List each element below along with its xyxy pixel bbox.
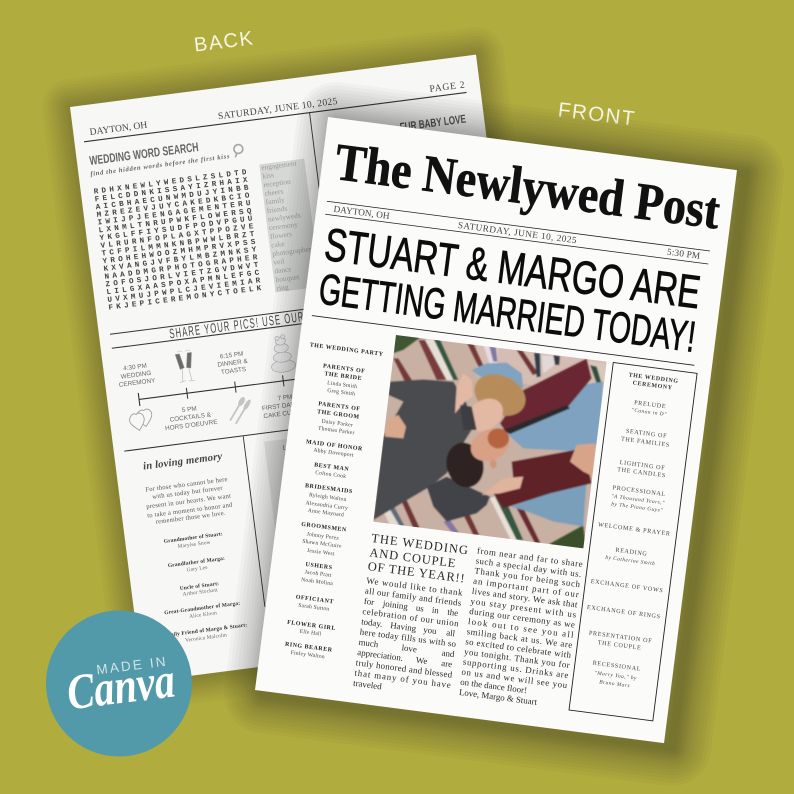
article column 1: the <box>447 607 459 618</box>
article column 2: Love, Margo & Stuart <box>458 687 538 707</box>
maroon vest <box>500 358 592 433</box>
panel: front page <box>255 117 737 743</box>
word list panel: ring <box>276 282 289 293</box>
date: SATURDAY, JUNE 10, 2025 <box>457 221 577 246</box>
ceremony box: Bruno Mars <box>599 679 630 689</box>
wedding party column <box>270 342 384 663</box>
woman's face <box>471 398 504 432</box>
timeline <box>115 324 372 439</box>
article column 2: look out to see you all <box>467 616 575 640</box>
wedding party column: Abby Davenport <box>313 448 354 459</box>
time: 5:30 PM <box>666 248 701 262</box>
woman's hair <box>474 373 526 417</box>
ceremony box: THE CANDLES <box>617 467 666 479</box>
wedding party column: Sarah Sutton <box>298 603 330 613</box>
word search grid <box>93 169 265 313</box>
icon: fork and knife <box>228 395 252 425</box>
article column 1: you <box>423 624 438 636</box>
article column 1: love <box>401 642 418 654</box>
dateline <box>325 201 710 264</box>
wedding party column: BRIDESMAIDS <box>305 483 353 495</box>
word list panel: bouquet <box>275 272 300 284</box>
grey photo panel <box>264 428 393 592</box>
word search grid: NAADDMGRPHOTOGRAPHER <box>104 254 261 282</box>
ceremony box: by The Piano Guys" <box>611 501 663 514</box>
memory names: Veronica Malcolm <box>185 632 228 644</box>
wedding party column: OFFICIANT <box>295 595 334 605</box>
article column 2: you stay present with us <box>470 596 577 620</box>
word list panel: engagement <box>261 159 297 172</box>
wedding party column: GROOMSMEN <box>301 522 347 534</box>
wedding party column: Jessie West <box>307 548 335 557</box>
article column 1: traveled <box>353 678 383 691</box>
timeline entry: ceremony: CEREMONY <box>118 377 156 389</box>
article column 1: are <box>441 658 453 669</box>
article heading: THE WEDDING <box>371 531 469 557</box>
wedding party column: Anne Maynard <box>307 508 344 519</box>
wedding party column: Noah Molina <box>301 577 334 587</box>
article column 1: We <box>415 655 428 666</box>
grass top <box>394 335 421 354</box>
word search grid: TCFPILMMNKNBPWWLBRZT <box>101 231 258 259</box>
word list panel: kiss <box>262 170 274 181</box>
word search grid: FELCDDNKISSAYIZRHAIX <box>94 176 251 204</box>
word search grid: RDHXNEWLYWEDSLZSLDTD <box>93 169 250 197</box>
memory heading: in loving memory <box>142 450 223 472</box>
grass bottom <box>549 525 585 548</box>
article column 2: supporting us. Drinks are <box>462 656 569 680</box>
ceremony box: THE COUPLE <box>597 640 642 652</box>
word search grid: AICBHAECUNWMDUJYINBB <box>95 184 252 212</box>
photo: couple on striped blanket <box>374 335 606 548</box>
article column 1: Having <box>390 620 417 633</box>
memory names <box>151 530 249 647</box>
word search grid: MZREZEVJUYCAKEDKBCIO <box>96 192 253 220</box>
dark collar <box>460 405 477 430</box>
word search grid: VLRURNFOPLAGXTPPOZVE <box>100 223 257 251</box>
word search grid: FKJEPICEREMONYCTOELK <box>108 285 265 313</box>
word list panel: family <box>265 195 286 206</box>
wedding party column: THE BRIDE <box>324 371 362 382</box>
grey photo panel: LOVE NOTES <box>282 439 328 452</box>
back masthead <box>82 79 467 142</box>
wedding party column: Finley Walton <box>290 650 325 660</box>
memory paragraph: remember those we love. <box>155 510 226 526</box>
date: SATURDAY, JUNE 10, 2025 <box>217 96 338 122</box>
blanket stripes bottom <box>384 510 400 525</box>
article column 1: appreciation. <box>357 647 404 663</box>
wedding party column: Greg Smith <box>327 388 355 397</box>
word list panel: photographer <box>272 244 312 258</box>
ceremony box: EXCHANGE OF RINGS <box>586 605 661 620</box>
word list panel: newlyweds <box>267 211 301 224</box>
wedding party column: Johnny Perez <box>306 532 340 542</box>
memory names: Uncle of Stuart: <box>179 581 220 592</box>
article column 1: truly honored and blessed <box>355 657 453 680</box>
memory names: Marylee Snow <box>177 540 211 550</box>
timeline entry: cocktails: COCKTAILS & <box>169 411 212 424</box>
page number: PAGE 2 <box>429 80 465 95</box>
article column 2: from near and far to share <box>476 545 583 569</box>
label: back: BACK <box>193 27 255 57</box>
article column 1: joining <box>381 598 409 612</box>
headline <box>316 218 704 362</box>
article column 1 <box>353 575 464 700</box>
ceremony box: READING <box>615 548 648 558</box>
location: DAYTON, OH <box>89 120 148 138</box>
wedding party column: Ryleigh Walton <box>309 492 347 503</box>
memory names: Family Friend of Marga & Stuart: <box>163 622 248 639</box>
wedding party column: FLOWER GIRL <box>287 620 336 632</box>
timeline entry: ceremony: WEDDING <box>120 370 152 381</box>
word search grid: LILGXAASPOXAPMNLEFGC <box>106 269 263 297</box>
word search grid: ZOFOSJORLVIETZGVDWVT <box>105 261 262 290</box>
subtitle: find the hidden words before the first kiss <box>90 153 230 178</box>
word list panel: dance <box>274 264 292 275</box>
timeline entry: dinner: DINNER & <box>217 358 249 369</box>
panel: back page <box>70 55 549 682</box>
wedding party column: MAID OF HONOR <box>306 439 363 453</box>
memory names: Great-Grandmother of Marga: <box>164 601 241 616</box>
article heading: OF THE YEAR!! <box>367 559 465 586</box>
article column 2: so excited to celebrate with <box>465 636 572 660</box>
wedding party column: USHERS <box>305 562 333 571</box>
back page shadow <box>70 55 549 682</box>
badge text: canva: Canva <box>64 652 178 720</box>
wedding party column: Alexandria Curry <box>305 500 348 512</box>
memory paragraph <box>144 476 234 527</box>
timeline entry: cocktails: 5 PM <box>182 405 197 414</box>
column divider <box>310 113 334 302</box>
timeline entry: first dance: CAKE CUTTING <box>263 407 311 420</box>
hashtag banner: SHARE YOUR PICS! USE OUR HASHTAG <box>169 303 352 341</box>
wedding party column: Colton Cook <box>315 470 347 480</box>
front page shadow <box>263 121 745 747</box>
word list panel: flowers <box>270 229 293 241</box>
wedding party column: PARENTS OF <box>323 363 366 375</box>
ceremony box: CEREMONY <box>632 380 673 392</box>
timeline entry: cocktails: HORS D'OEUVRE <box>165 419 218 432</box>
article column 2: smiling back at us. We are <box>466 626 573 650</box>
timeline entry: dinner: TOASTS <box>221 366 247 376</box>
ceremony box: "Canon in D" <box>631 407 667 418</box>
ceremony box: PRELUDE <box>634 400 666 410</box>
timeline entry: dinner: 6:15 PM <box>219 351 244 360</box>
wedding party column: THE WEDDING PARTY <box>309 342 384 358</box>
word search grid: YKGLFFIYSUDFPODVPGUU <box>99 215 256 243</box>
word search grid: UVXMUJPWPLCJEVIEMIAR <box>107 277 264 305</box>
wedding party column: PARENTS OF <box>318 401 361 413</box>
blanket <box>374 338 602 544</box>
word list panel: reception <box>263 177 292 189</box>
article column 1: celebration of our union <box>362 606 460 629</box>
ceremony box: "Marry You," by <box>594 670 637 682</box>
memory paragraph: with us today but forever <box>152 485 224 501</box>
wedding party column: Linda Smith <box>327 380 357 390</box>
ceremony box: THE WEDDING <box>628 372 679 385</box>
article column 1: in <box>431 605 440 616</box>
hands <box>455 373 473 413</box>
timeline entry: first dance: 7 PM <box>277 393 293 402</box>
section rule <box>124 402 506 451</box>
word search grid: LXNMLTNRUPWKFLOWERSQ <box>98 207 255 235</box>
badge: made in canva <box>46 610 192 756</box>
man's hair <box>446 442 484 488</box>
article column 1: We would like to thank <box>366 575 464 598</box>
memory names: Grandfather of Marga: <box>168 556 225 569</box>
article column 1: today. <box>361 616 383 629</box>
timeline entry: first dance: FIRST DANCE & <box>262 399 311 412</box>
blanket stripes top <box>418 340 447 380</box>
timeline entry: ceremony: 4:30 PM <box>123 362 147 372</box>
man's face <box>470 428 510 462</box>
article column 2: on us and we will see you <box>461 667 568 690</box>
ceremony box: THE FAMILIES <box>621 437 670 449</box>
article column 1: and <box>441 648 456 659</box>
word list panel: cheers <box>264 187 284 198</box>
word search grid: IWIJPJEENGAGEMENTERU <box>97 200 254 228</box>
word search grid: YROHEHWOOZMHMPRVXPSS <box>102 238 259 266</box>
article column 1: for <box>363 596 375 607</box>
article column 2: Thank you for being such <box>474 566 581 589</box>
wedding party column: Thomas Parker <box>318 426 355 436</box>
ceremony box: "A Thousand Years," <box>611 494 665 506</box>
article column 1: us <box>415 603 425 614</box>
memory names: Alice Kloon <box>189 610 218 620</box>
ceremony box: PRESENTATION OF <box>589 631 653 645</box>
word list panel: ceremony <box>268 220 299 232</box>
city: DAYTON, OH <box>333 205 390 222</box>
wedding party column: Elle Hall <box>299 629 322 638</box>
ceremony box: EXCHANGE OF VOWS <box>590 579 664 594</box>
icon: wedding cake <box>268 334 296 374</box>
icon: champagne glasses <box>175 350 195 383</box>
article column 2 <box>458 545 584 711</box>
word search heading <box>88 134 244 178</box>
ceremony box: RECESSIONAL <box>592 661 641 673</box>
memory paragraph: to take a moment to honor and <box>147 502 233 520</box>
denim jacket <box>472 363 523 388</box>
memory paragraph: present in our hearts. We want <box>146 493 232 511</box>
ceremony box: LIGHTING OF <box>619 460 666 472</box>
wedding party column: Shawn McGuire <box>302 539 342 550</box>
wedding party column: BEST MAN <box>314 462 350 473</box>
right column heading: FUR BABY LOVE <box>399 113 467 134</box>
wedding party column: Jacob Pratt <box>304 569 332 579</box>
memory names: Gary Lee <box>186 565 209 573</box>
article column 2: during our ceremony as we <box>469 606 576 630</box>
word search grid: KXVANGJVFBYLMBZMNKSY <box>103 246 260 274</box>
word list panel: friends <box>266 204 288 215</box>
badge text: made in: MADE IN <box>96 654 169 677</box>
ceremony box: SEATING OF <box>625 429 667 440</box>
in loving memory <box>140 450 250 647</box>
article column 2: lives and story. We ask that <box>471 586 579 609</box>
word list panel: veil <box>273 256 285 267</box>
man's maroon sweater <box>493 448 592 508</box>
word list panel: cake <box>271 239 285 250</box>
ceremony box: WELCOME & PRAYER <box>598 522 671 538</box>
article heading <box>367 531 469 586</box>
wedding party column: THE GROOM <box>317 409 360 421</box>
masthead title: The Newlywed Post <box>332 133 724 241</box>
article heading: AND COUPLE <box>369 545 457 570</box>
article column 2: you tonight. Thank you for <box>464 646 570 670</box>
memory names: Arthur Stockett <box>182 587 218 598</box>
label: front: FRONT <box>557 98 637 131</box>
word list panel <box>259 157 321 293</box>
article column 1: all <box>446 627 456 639</box>
article column 2: on the dance floor! <box>460 677 528 695</box>
column divider lower <box>243 436 265 607</box>
wedding party column: Daisy Parker <box>321 419 353 429</box>
memory paragraph: For those who cannot be here <box>145 476 228 494</box>
ceremony box: by Catherine Smith <box>605 555 656 567</box>
article column 1: all our family and friends <box>364 586 462 608</box>
article column 1: much <box>358 637 379 649</box>
ceremony box <box>569 362 697 721</box>
article column 1: that many of you have <box>354 668 452 690</box>
icon: two hearts <box>128 409 154 431</box>
heading text: WEDDING WORD SEARCH <box>89 140 199 168</box>
wedding party column: RING BEARER <box>285 642 333 654</box>
ceremony box: PROCESSIONAL <box>612 485 666 498</box>
article column 1: here today fills us with so <box>359 627 457 649</box>
icon: magnifier <box>233 144 244 157</box>
article column 2: such a special day with us. <box>475 555 582 579</box>
memory names: Grandmother of Stuart: <box>164 531 223 545</box>
grey sweater <box>373 379 472 520</box>
article column 2: an important part of our <box>473 576 579 599</box>
